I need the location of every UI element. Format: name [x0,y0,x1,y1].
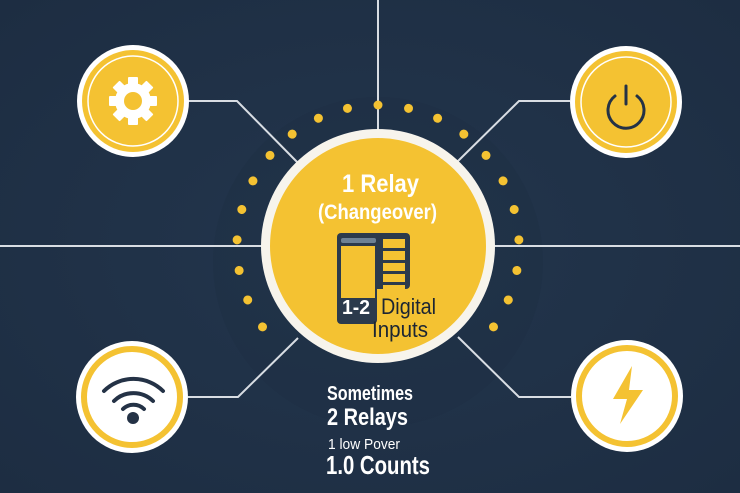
icon: wifi [76,341,188,453]
text block: summary: Sometimes [327,383,413,405]
title: 1 Relay: 1 Relay [342,170,419,198]
icon: lightning [571,340,683,452]
label: 1-2 Digital Inputs: 1-2 [342,297,370,319]
label: 1-2 Digital Inputs: Digital [381,294,436,319]
icon: gear [77,45,189,157]
icon: power [570,46,682,158]
label: 1-2 Digital Inputs [342,294,436,342]
text block: summary: 2 Relays [327,404,408,431]
icon: relay module [337,233,410,324]
text block: summary: 1 low Pover [328,436,400,453]
central circle [261,129,495,363]
subtitle: Changeover: (Changeover) [318,201,437,224]
dotted ring [232,100,524,333]
text block: summary: 1.0 Counts [326,450,430,480]
text block: summary [326,383,430,480]
label: 1-2 Digital Inputs: Inputs [372,317,428,342]
